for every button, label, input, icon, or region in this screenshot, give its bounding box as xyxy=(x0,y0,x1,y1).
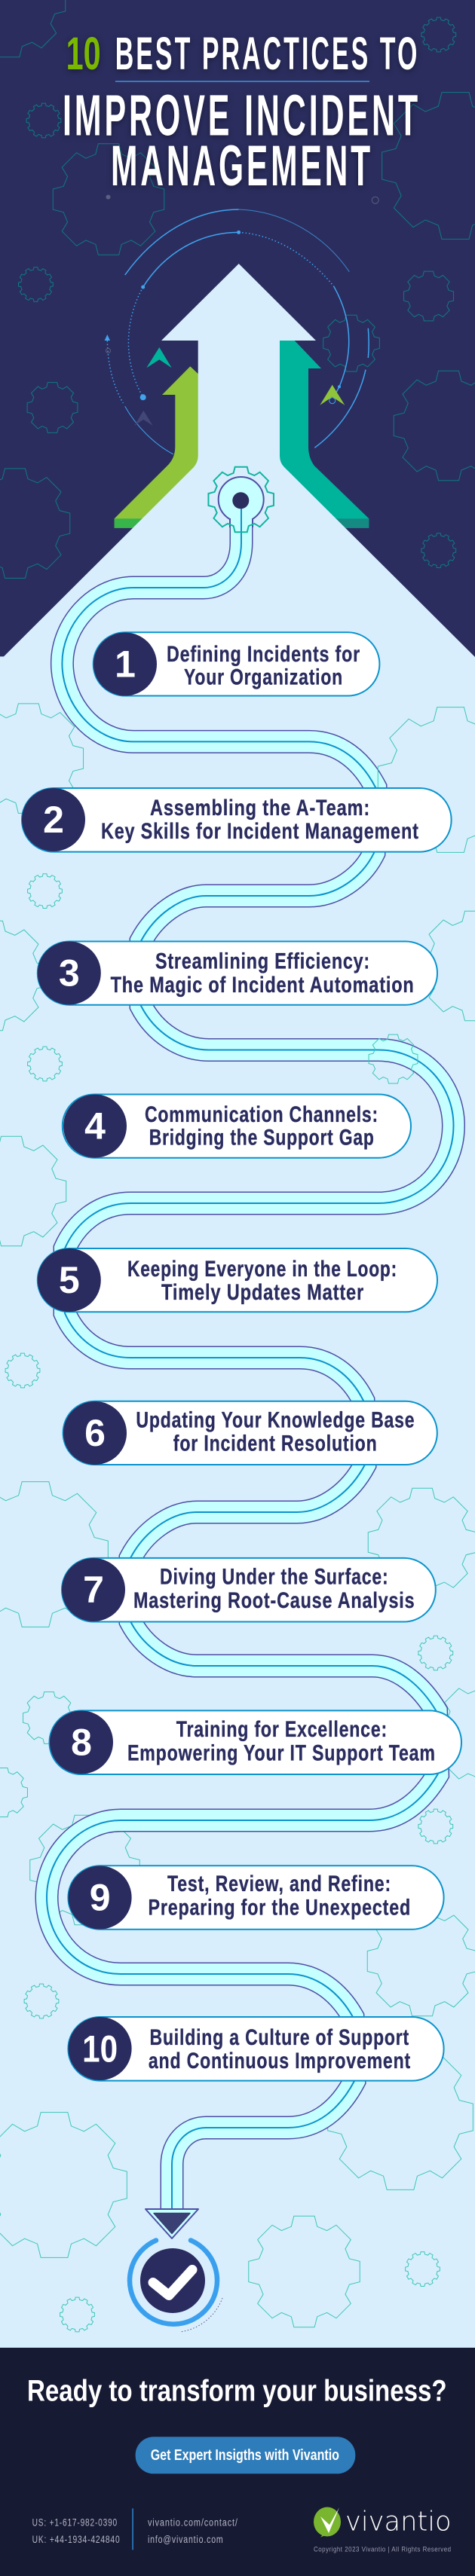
orbit nodes xyxy=(105,194,378,404)
step 5 xyxy=(38,1248,437,1312)
icon: faint chevron xyxy=(134,411,153,426)
step 1: Your Organization xyxy=(184,665,343,690)
icon: teal chevron xyxy=(146,347,172,368)
step 1: Defining Incidents for xyxy=(167,642,360,667)
step 4: 4 xyxy=(84,1105,106,1147)
step 2: 2 xyxy=(43,799,64,841)
title divider xyxy=(115,81,369,82)
step 6: 6 xyxy=(84,1412,106,1454)
step 7: Diving Under the Surface: xyxy=(160,1565,389,1590)
step 8: Training for Excellence: xyxy=(176,1717,388,1742)
copyright: Copyright 2023 Vivantio | All Rights Reserved xyxy=(314,2546,452,2554)
step 7: 7 xyxy=(83,1569,104,1611)
step 4 xyxy=(63,1094,411,1158)
button xyxy=(136,2437,355,2474)
icon: road arrowhead xyxy=(146,2209,198,2238)
step 4: Bridging the Support Gap xyxy=(149,1125,375,1150)
logo: vivantio: vivantio xyxy=(345,2507,452,2538)
phone contacts xyxy=(32,2517,121,2545)
web contacts: info@vivantio.com xyxy=(148,2534,223,2545)
step 5: Timely Updates Matter xyxy=(161,1280,364,1305)
step 3: Streamlining Efficiency: xyxy=(155,949,370,974)
icon: lime chevron xyxy=(320,385,345,405)
dark header background xyxy=(0,0,475,663)
web contacts: vivantio.com/contact/ xyxy=(148,2517,238,2529)
step 9: 9 xyxy=(90,1876,111,1918)
panel: footer xyxy=(0,2348,475,2576)
title: 10 xyxy=(66,28,101,79)
step 2: Assembling the A-Team: xyxy=(150,796,370,820)
title xyxy=(63,28,421,198)
step 2 xyxy=(22,788,452,852)
step 1 xyxy=(93,632,379,696)
step 3 xyxy=(38,942,437,1005)
step 6: for Incident Resolution xyxy=(173,1432,378,1456)
step 6 xyxy=(63,1401,437,1465)
step 9 xyxy=(68,1866,444,1930)
step 10: 10 xyxy=(82,2028,118,2070)
winding road xyxy=(47,501,454,2211)
step 7 xyxy=(62,1558,436,1621)
web contacts xyxy=(148,2517,238,2545)
step 1: 1 xyxy=(115,643,136,686)
step 8 xyxy=(50,1710,461,1774)
step 10 xyxy=(68,2017,444,2081)
step 5: Keeping Everyone in the Loop: xyxy=(127,1257,397,1282)
step 8: 8 xyxy=(71,1721,92,1763)
step 5: 5 xyxy=(59,1259,80,1301)
step 9: Test, Review, and Refine: xyxy=(167,1872,391,1896)
icon: checkmark badge xyxy=(130,2241,222,2332)
contact divider xyxy=(132,2508,133,2550)
step 4: Communication Channels: xyxy=(145,1102,378,1127)
icon: green rising arrow xyxy=(115,366,204,528)
step 3: 3 xyxy=(59,952,80,995)
orbit arcs and dotted trails xyxy=(107,209,369,454)
icon: teal rising arrow xyxy=(271,341,369,528)
phone contacts: US: +1-617-982-0390 xyxy=(32,2517,118,2529)
button: Get Expert Insigths with Vivantio xyxy=(151,2447,339,2464)
icon: road start gear xyxy=(208,467,274,532)
phone contacts: UK: +44-1934-424840 xyxy=(32,2534,121,2545)
